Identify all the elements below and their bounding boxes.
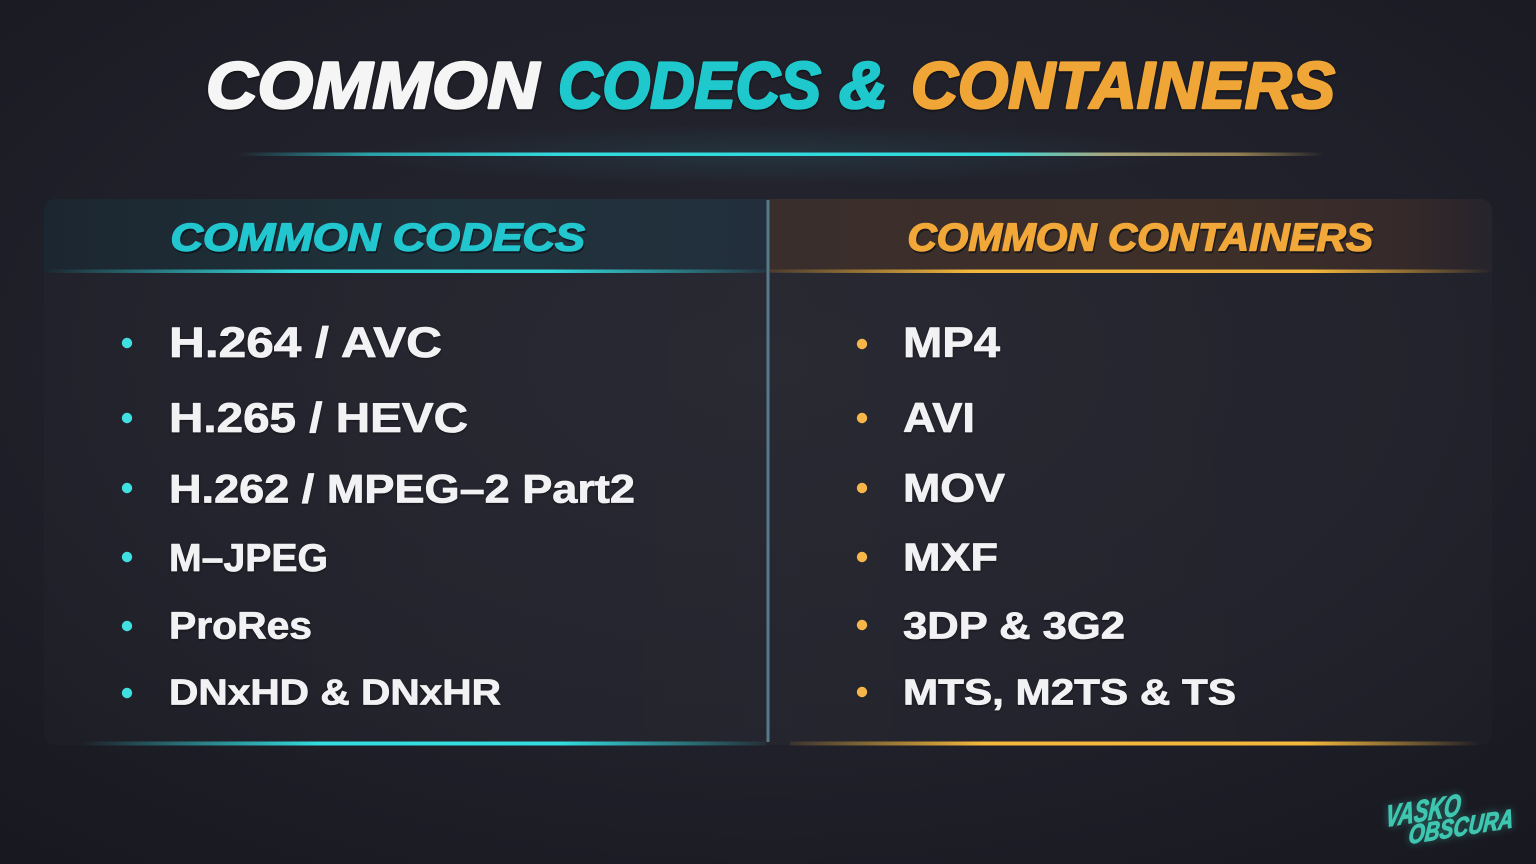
- panel: containers header: [769, 199, 1492, 273]
- title: CODECS: [558, 48, 821, 122]
- item: MP4: MP4: [903, 319, 1000, 367]
- list: containers: [857, 319, 1236, 712]
- item: ProRes: [122, 606, 312, 648]
- bottom accent: containers: [790, 742, 1480, 746]
- item: H.262 / MPEG-2 Part2: H.262 / MPEG–2 Part2: [169, 468, 635, 512]
- item: ProRes: ProRes: [169, 606, 312, 648]
- logo: Vasko Obscura: VASKO: [1384, 788, 1463, 834]
- title: &: [839, 48, 888, 122]
- title: [206, 48, 1335, 122]
- item: MP4: [857, 319, 1000, 367]
- panel: codecs header: [44, 199, 767, 273]
- list: codecs: [122, 319, 635, 712]
- item: M-JPEG: M–JPEG: [169, 537, 328, 580]
- panel: comparison table: [44, 199, 1492, 746]
- item: MXF: [857, 536, 998, 580]
- bottom accent: codecs: [80, 742, 766, 746]
- logo: Vasko Obscura: OBSCURA: [1407, 803, 1515, 850]
- title underline: [238, 124, 1324, 184]
- item: 3DP & 3G2: 3DP & 3G2: [903, 606, 1125, 648]
- item: MOV: [857, 466, 1005, 510]
- column divider: [766, 200, 770, 742]
- panel background: [44, 199, 1492, 745]
- heading: common containers: COMMON CONTAINERS: [908, 216, 1373, 260]
- item: DNxHD & DNxHR: DNxHD & DNxHR: [169, 672, 501, 712]
- item: H.265 / HEVC: H.265 / HEVC: [169, 394, 468, 441]
- item: MTS, M2TS & TS: MTS, M2TS & TS: [903, 672, 1236, 712]
- item: H.264 / AVC: H.264 / AVC: [169, 319, 442, 367]
- title: COMMON: [206, 48, 540, 122]
- item: MOV: MOV: [903, 466, 1005, 510]
- heading: common codecs: COMMON CODECS: [170, 216, 585, 260]
- title: CONTAINERS: [911, 48, 1335, 122]
- item: MXF: MXF: [903, 536, 998, 580]
- item: AVI: AVI: [903, 394, 975, 441]
- logo: Vasko Obscura: [1384, 788, 1515, 850]
- item: AVI: [857, 394, 975, 441]
